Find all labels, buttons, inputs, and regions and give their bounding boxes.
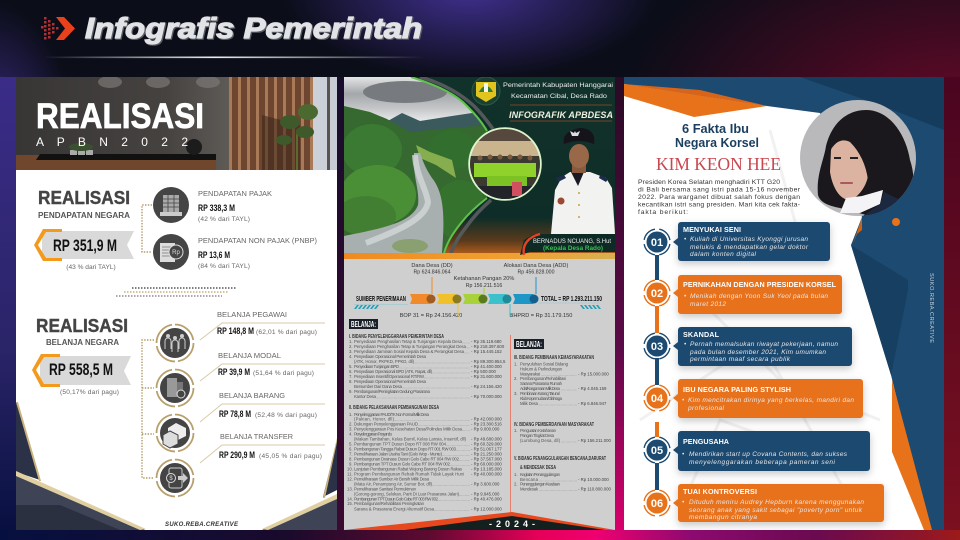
intro paragraph xyxy=(638,179,801,216)
portrait xyxy=(800,100,916,218)
text: non pajak: PENDAPATAN NON PAJAK (PNBP) xyxy=(198,236,317,245)
bidang II: Lanjutan Pembangunan Rabat Wojong Barong Dusun Rakas xyxy=(354,466,462,472)
bidang II: (Mata Air, Penampung Air, Sumur Bor, dll) xyxy=(354,482,433,486)
bidang III: - Rp 6.846.947 xyxy=(578,401,607,406)
sumber penerimaan ribbon xyxy=(354,263,602,319)
belanja column right: BELANJA: xyxy=(516,340,542,349)
bidang I: Penyediaan Tunjangan BPD xyxy=(354,364,399,369)
bidang III: Milik Desa xyxy=(520,401,539,406)
text: belanja barang: RP 78,8 M xyxy=(219,409,251,420)
bidang V: Mendesak xyxy=(520,486,539,492)
header text xyxy=(503,82,614,121)
panel: realisasi APBN xyxy=(16,76,337,530)
timeline connectors xyxy=(655,255,659,490)
icon: double arrow xyxy=(41,17,75,40)
bidang II: Dukungan Penyelenggaraan PAUD xyxy=(354,422,418,426)
name banner: (Kepala Desa Rado) xyxy=(543,246,603,252)
fact 04: Kim mencitrakan dirinya yang berkelas, mandiri dan xyxy=(688,397,854,404)
fact 02: Menikah dengan Yoon Suk Yeol pada bulan xyxy=(690,293,828,300)
bidang V: 1. xyxy=(514,472,518,477)
labels: Dana Desa (DD) xyxy=(411,263,453,269)
bidang II: - Rp 9.945.000 xyxy=(471,492,500,496)
labels: Ketahanan Pangan 20% xyxy=(454,276,514,282)
bidang I: - Rp 218.397.600 xyxy=(471,344,505,349)
fact 01: MENYUKAI SENI xyxy=(683,225,741,234)
bidang I: Bersumber Dari Dana Desa xyxy=(354,384,403,389)
fact 05: 05 xyxy=(651,445,663,457)
bidang V: & MENDESAK DESA xyxy=(520,465,556,471)
icon: non pajak: Rp xyxy=(172,250,180,256)
bidang I: Penyediaan Penghasilan Tetap & Tunjangan Kepala Desa xyxy=(354,339,463,344)
block: belanja negara: (50,17% dari pagu) xyxy=(60,389,119,396)
bidang II: Pemeliharaan Jalan Usaha Tani (Golo Wop - Munte) xyxy=(354,452,443,456)
text: belanja barang: BELANJA BARANG xyxy=(219,391,285,400)
fact 03: SKANDAL xyxy=(683,330,720,339)
text: belanja transfer: (45,05 % dari pagu) xyxy=(259,453,322,460)
header text: Pemerintah Kabupaten Hanggarai xyxy=(503,82,614,89)
bidang III: 1. xyxy=(514,362,518,366)
text: belanja pegawai xyxy=(217,312,316,336)
portrait: kepala desa xyxy=(551,128,615,234)
text: pajak: (42 % dari TAYL) xyxy=(198,216,250,223)
bidang II: Pembangunan Drainase Dusun Golo Cabe RT 004 RW 002 xyxy=(354,456,460,462)
bidang I: 8. xyxy=(349,379,353,384)
text: non pajak: (84 % dari TAYL) xyxy=(198,263,250,270)
fact 06: • xyxy=(682,499,685,506)
bidang II: 13. xyxy=(347,486,353,492)
sumber penerimaan ribbon: SUMBER PENERIMAAN xyxy=(356,294,406,303)
text: belanja pegawai: RP 148,8 M xyxy=(217,326,254,337)
bidang II: Pembangunan TPT Dusun Golo Cabe RT 003 RW 002 xyxy=(354,496,439,502)
bidang IV: 1. xyxy=(514,428,518,433)
bidang II: Pemeliharaan Sanitasi Permukiman xyxy=(354,486,417,492)
text: belanja transfer: RP 290,9 M xyxy=(219,450,255,461)
fact 02: • xyxy=(684,293,687,300)
labels: BHPRD = Rp 31.179.150 xyxy=(510,313,572,319)
team photo xyxy=(468,127,542,201)
block: pendapatan negara: REALISASI xyxy=(38,188,130,208)
bidang I: 5. xyxy=(349,364,353,369)
bidang V: V. BIDANG PENANGGULANGAN BENCANA,DARURAT xyxy=(514,456,606,462)
bidang III: - Rp 4.045.159 xyxy=(578,386,607,391)
footer year: - 2 0 2 4 - xyxy=(489,519,535,529)
fact 01: dalam konten digital xyxy=(690,251,757,258)
bidang II: 15. xyxy=(347,501,353,506)
bidang I: 3. xyxy=(349,349,353,354)
bidang II: 7. xyxy=(349,452,353,456)
fact 06: Dituduh meniru Audrey Hepburn karena menggunakan xyxy=(689,499,864,506)
bidang II: 12. xyxy=(347,476,353,482)
bidang II: - Rp 51.067.177 xyxy=(471,446,502,452)
bidang III: III. BIDANG PEMBINAAN KEMASYARAKATAN xyxy=(514,355,594,361)
name: KIM KEON HEE xyxy=(656,154,781,174)
photo title: A P B N 2 0 2 2 xyxy=(36,135,188,149)
bidang II: (Gorong-gorong, Selokan, Parit Di Luar Prasarana Jalan) xyxy=(354,492,460,496)
text: non pajak: RP 13,6 M xyxy=(198,250,230,261)
text: belanja pegawai: (62,01 % dari pagu) xyxy=(256,329,317,336)
text: belanja transfer xyxy=(219,434,322,460)
bidang II: - Rp 21.250.000 xyxy=(471,452,502,456)
bidang II: - Rp 40.000.000 xyxy=(471,472,502,476)
bidang II: Pembangunan TPT Dusun Golo Cabe RT 004 RW 002 xyxy=(354,462,451,466)
header title: Infografis Pemerintah xyxy=(85,13,422,45)
bidang II xyxy=(347,405,502,512)
text: non pajak xyxy=(198,236,317,270)
labels: Rp 156.211.516 xyxy=(466,283,502,289)
fact 05 xyxy=(644,431,870,471)
bidang V: - Rp 10.000.000 xyxy=(578,477,609,482)
text: belanja transfer: BELANJA TRANSFER xyxy=(220,432,293,441)
chevrons xyxy=(410,294,538,304)
vertical credit: SUKO.REBA.CREATIVE xyxy=(928,273,934,343)
credit: SUKO.REBA.CREATIVE xyxy=(165,522,239,528)
bidang III: Pembinaan Karang Taruna/ xyxy=(520,391,561,396)
bidang III: Pembangunan/Rehabilitasi xyxy=(520,376,566,381)
icon: modal xyxy=(156,370,194,406)
header photo xyxy=(16,76,337,170)
intro paragraph: Presiden Korea Selatan menghadiri KTT G20 xyxy=(638,179,780,186)
bidang I: Penyediaan Jaminan Sosial Kepala Desa & Perangkat Desa xyxy=(354,349,465,354)
fact 03: pada bulan desember 2021, Kim umumkan xyxy=(689,349,826,356)
bidang I: 4. xyxy=(349,354,353,359)
photo title: REALISASI xyxy=(36,97,204,136)
text: belanja barang: (52,48 % dari pagu) xyxy=(255,412,317,419)
bidang I xyxy=(349,334,506,399)
bidang III: - Rp 15.000.000 xyxy=(578,372,609,376)
name banner: BERNADUS NCUANG, S.Hut xyxy=(533,239,611,245)
title: Negara Korsel xyxy=(675,135,759,150)
title: 6 Fakta Ibu xyxy=(682,121,749,136)
bidang II: 5. xyxy=(349,442,353,446)
bidang I: - Rp 35.119.680 xyxy=(471,339,502,344)
river landscape xyxy=(336,77,490,253)
heading: Infografis Pemerintah xyxy=(86,14,423,46)
text: belanja modal: (51,64 % dari pagu) xyxy=(253,370,314,377)
bidang IV: (Lumbung Desa, dll) xyxy=(520,438,561,443)
bidang II: - Rp 3.600.000 xyxy=(471,482,500,486)
bidang IV: Penguatan Ketahanan xyxy=(520,428,557,433)
text: belanja barang xyxy=(219,393,316,418)
banner: total pendapatan xyxy=(34,229,134,261)
block: pendapatan negara: (43 % dari TAYL) xyxy=(66,264,116,271)
bidang II: - Rp 13.185.000 xyxy=(471,466,502,472)
bidang I: 7. xyxy=(349,374,353,379)
bidang I: Penyediaan Operasional Pemerintah Desa xyxy=(354,379,427,384)
bidang II: II. BIDANG PELAKSANAAN PEMBANGUNAN DESA xyxy=(349,405,439,411)
footer ornament xyxy=(16,402,337,530)
fact 05: • xyxy=(682,451,685,458)
labels: BOP 31 = Rp 24.156.420 xyxy=(400,313,462,319)
text: pajak: PENDAPATAN PAJAK xyxy=(198,189,272,198)
bidang I: - Rp 70.000.000 xyxy=(471,394,502,399)
fact 06: 06 xyxy=(651,498,663,510)
fact 01 xyxy=(644,222,830,261)
bidang III: Masyarakat xyxy=(520,372,541,376)
text: belanja modal: BELANJA MODAL xyxy=(218,351,281,360)
fact 06: TUAI KONTROVERSI xyxy=(683,487,757,496)
bidang II: Program Pembangunan Rehab Rumah Tidak Layak Huni xyxy=(354,472,464,476)
bidang I: - Rp 89.300.954,5 xyxy=(471,359,506,364)
bidang I: - Rp 31.600.000 xyxy=(471,374,502,379)
banner: total belanja xyxy=(32,354,131,387)
sumber penerimaan ribbon: TOTAL = RP 1.293.211.150 xyxy=(541,294,602,303)
bidang IV: IV. BIDANG PEMBERDAYAAN MASYARAKAT xyxy=(514,422,594,428)
bidang II: - Rp 60.000.000 xyxy=(471,462,502,466)
bidang II: Pembangunan Tangga Rabat Dusun Dopo RT 001 RW 003 xyxy=(354,446,457,452)
bidang II: (Makan Tambahan, Kelas Bumil, Kelas Lansia, Insentif, dll) xyxy=(354,436,467,442)
bidang II: 2. xyxy=(349,422,353,426)
bidang II: - Rp 42.000.000 xyxy=(471,416,502,422)
fact 02 xyxy=(644,275,842,314)
bidang III: Adat/Keagamaan Milik Desa xyxy=(520,386,561,391)
icon: transfer xyxy=(156,460,194,496)
bidang II: - Rp 60.329.000 xyxy=(471,442,502,446)
intro paragraph: 2022. Para warganet dibuat salah fokus dengan xyxy=(638,194,800,201)
fact 01: • xyxy=(684,236,687,243)
bidang I: Penyediaan Operasional BPD (ATK, Rapat, dll) xyxy=(354,369,433,374)
bidang II: 11. xyxy=(347,472,353,476)
bidang I: I. BIDANG PENYELENGGARAAN PEMERINTAH DESA xyxy=(349,334,444,340)
bidang I: (ATK, Honor, PKPKD, PPKD, dll) xyxy=(354,359,415,364)
block: pendapatan negara xyxy=(34,187,317,271)
belanja column left: BELANJA: xyxy=(351,320,376,329)
bidang IV: - Rp 156.211.000 xyxy=(578,438,611,443)
banner: total pendapatan: RP 351,9 M xyxy=(53,236,117,255)
panel: infografik APBDesa xyxy=(336,77,615,530)
icon: pegawai xyxy=(156,324,194,362)
photo title xyxy=(36,102,202,146)
block: pendapatan negara: PENDAPATAN NEGARA xyxy=(38,211,130,220)
bidang IV xyxy=(514,422,611,443)
bidang V: Penanggulangan Keadaan xyxy=(520,482,561,486)
intro paragraph: fakta berikut: xyxy=(638,209,688,216)
bidang II: 10. xyxy=(347,466,353,472)
fact 04 xyxy=(644,379,863,418)
fact 02: maret 2012 xyxy=(690,301,726,308)
bidang III: Sarana Prasarana Rumah xyxy=(520,381,563,386)
bidang I: - Rp 15.445.152 xyxy=(471,349,502,354)
block: belanja negara: BELANJA NEGARA xyxy=(46,338,119,347)
bidang II: Penyelenggaraan PAUD/TK Non Formal Milik Desa xyxy=(354,412,430,417)
footer year xyxy=(344,512,615,530)
header title xyxy=(41,13,424,58)
header text: Kecamatan Cibal, Desa Rado xyxy=(511,93,607,100)
bidang II: 9. xyxy=(349,462,353,466)
bidang IV: Pangan Tingkat Desa xyxy=(520,433,555,438)
bidang II: 6. xyxy=(349,446,353,452)
labels: Rp 456.828.000 xyxy=(518,270,555,276)
icon: barang xyxy=(156,414,194,452)
icon: pajak xyxy=(153,187,189,223)
bidang III: Penyuluhan Sosial Bidang xyxy=(520,362,569,366)
text: pajak: RP 338,3 M xyxy=(198,203,235,214)
header text: INFOGRAFIK APBDESA xyxy=(509,110,613,120)
orange strip xyxy=(344,253,615,259)
bidang I: 2. xyxy=(349,344,353,349)
bidang II: - Rp 9.000.000 xyxy=(471,426,500,432)
fact 01: Kuliah di Universitas Kyonggi jurusan xyxy=(690,236,808,243)
icon: transfer: $ xyxy=(169,476,173,482)
labels: Rp 624.846.064 xyxy=(414,270,451,276)
bidang II: Pembangunan/Rehabilitasi Peningkatan xyxy=(354,501,425,506)
fact 03 xyxy=(644,327,852,366)
fact 06 xyxy=(644,484,884,522)
intro paragraph: kecantikan istri sang presiden. Mari kita cek fakta- xyxy=(638,202,800,208)
bidang II: 1. xyxy=(349,412,353,417)
fact 05: menyelenggarakan beberapa pameran seni xyxy=(689,459,836,466)
bidang V: - Rp 110.800.000 xyxy=(578,486,611,492)
bidang I: Penyediaan Operasional Pemerintah Desa xyxy=(354,354,427,359)
bidang III xyxy=(514,355,609,406)
bidang II: Pembangunan TPT Dusun Dopo RT 008 RW 004 xyxy=(354,442,447,446)
bidang II: Penyelenggaraan Posyandu xyxy=(354,432,393,436)
fact 06: seorang anak yang sakit sebagai "poverty porn" untuk xyxy=(689,507,863,514)
bidang II: Sarana & Prasarana Energi Alternatif Desa xyxy=(354,506,435,512)
bidang II: Penyelenggaraan Pos Kesehatan Desa/Polindes Milik Desa xyxy=(354,426,463,432)
bidang II: Pemeliharaan Sumber Air Bersih Milik Desa xyxy=(354,476,430,482)
block: belanja negara: REALISASI xyxy=(36,316,128,336)
bidang V: 2. xyxy=(514,482,518,486)
name banner xyxy=(520,234,615,255)
fact 01: melukis & mendapatkan gelar doktor xyxy=(690,244,809,251)
bidang I: - Rp 500.000 xyxy=(471,369,496,374)
panel: fakta Kim Keon Hee xyxy=(624,77,944,530)
bidang III: Klub Kepemudaan/Olahraga xyxy=(520,396,563,401)
bidang V: Bencana xyxy=(520,477,539,482)
logo xyxy=(472,77,500,105)
bidang III: 3. xyxy=(514,391,518,396)
bidang I: Penyediaan Penghasilan Tetap & Tunjangan Perangkat Desa xyxy=(354,344,467,349)
header photo xyxy=(336,77,615,259)
bidang II: 14. xyxy=(347,496,353,502)
bidang V xyxy=(514,456,611,492)
bidang I: Pembangunan/Peningkatan Gedung Prasarana xyxy=(354,389,431,394)
bidang V: Kegiatan Penanggulangan xyxy=(520,472,561,477)
intro paragraph: di Bali bersama sang istri pada 15-16 november xyxy=(638,186,801,194)
bidang I: 1. xyxy=(349,339,353,344)
fact 04: • xyxy=(682,397,685,404)
fact 01: 01 xyxy=(651,237,663,249)
bidang II: - Rp 23.300.516 xyxy=(471,422,502,426)
labels: Alokasi Dana Desa (ADD) xyxy=(504,263,568,269)
bidang II: (Pakian, Honor, dll) xyxy=(354,416,395,422)
fact 04: profesional xyxy=(687,405,725,412)
fact 04: 04 xyxy=(651,393,664,405)
fact 03: • xyxy=(684,341,687,348)
bidang I: Kantor Desa xyxy=(354,394,377,399)
fact 05: PENGUSAHA xyxy=(683,437,729,446)
bidang II: 8. xyxy=(349,456,353,462)
decorative shapes xyxy=(624,77,944,530)
banner: total belanja: RP 558,5 M xyxy=(49,360,113,379)
curved divider xyxy=(411,77,487,253)
fact 06: membangun citranya xyxy=(689,514,757,521)
fact 04: IBU NEGARA PALING STYLISH xyxy=(683,385,791,394)
fact 03: permintaan maaf secara publik xyxy=(689,356,791,363)
bidang I: - Rp 41.400.000 xyxy=(471,364,502,369)
text: belanja modal xyxy=(218,353,314,376)
labels xyxy=(400,263,572,319)
fact 03: Pernah memalsukan riwayat pekerjaan, namun xyxy=(690,341,838,348)
bidang II: - Rp 12.000.000 xyxy=(471,506,502,512)
text: belanja modal: RP 39,9 M xyxy=(218,367,250,378)
bidang II: - Rp 40.476.000 xyxy=(471,496,502,502)
fact 02: PERNIKAHAN DENGAN PRESIDEN KORSEL xyxy=(683,280,837,289)
fact 02: 02 xyxy=(651,288,663,300)
bidang I: Penyediaan Insentif/Operasional RT/RW xyxy=(354,374,425,379)
bidang I: - Rp 24.156.420 xyxy=(471,384,502,389)
bidang II: - Rp 37.567.000 xyxy=(471,456,502,462)
icon: non pajak xyxy=(153,234,189,270)
bidang III: 2. xyxy=(514,376,518,381)
text: belanja pegawai: BELANJA PEGAWAI xyxy=(217,310,287,319)
belanja column left xyxy=(347,319,506,512)
bidang II: 4. xyxy=(349,432,353,436)
title xyxy=(675,121,759,150)
bidang I: 6. xyxy=(349,369,353,374)
bidang I: 9. xyxy=(349,389,353,394)
bidang III: Hukum & Perlindungan xyxy=(520,366,563,372)
fact 05: Mendirikan start up Covana Contents, dan sukses xyxy=(689,451,848,458)
bidang II: 3. xyxy=(349,426,353,432)
belanja column right xyxy=(514,339,611,492)
fact 03: 03 xyxy=(651,341,663,353)
block: belanja negara xyxy=(32,310,325,496)
bidang II: - Rp 49.680.000 xyxy=(471,436,502,442)
text: pajak xyxy=(198,189,272,223)
